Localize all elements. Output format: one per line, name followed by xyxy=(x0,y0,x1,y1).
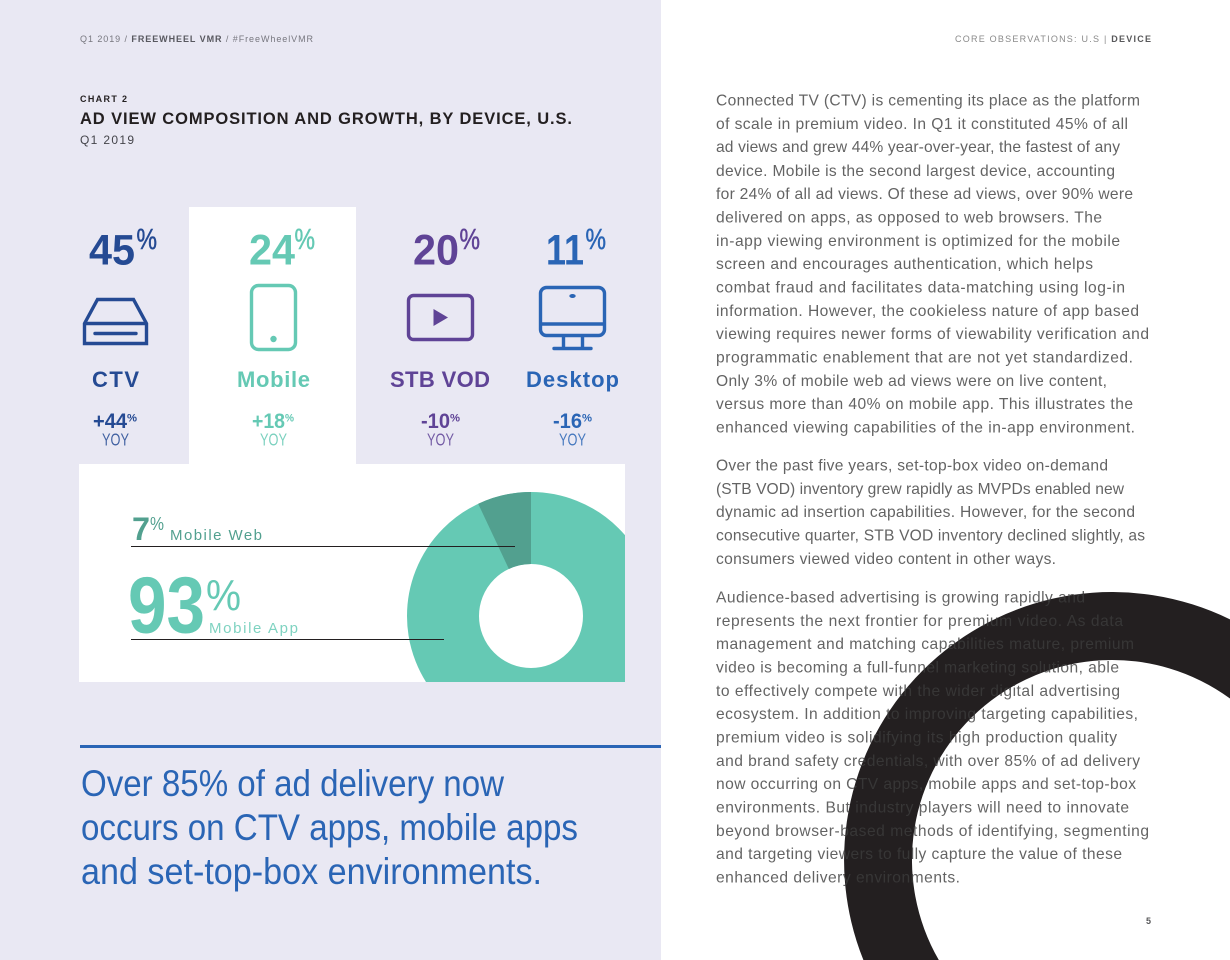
icon: video player xyxy=(408,296,472,340)
column: Desktop: Desktop xyxy=(526,367,619,392)
chart eyebrow: CHART 2 xyxy=(80,94,127,104)
body text: environments. But industry players will need to innovate xyxy=(716,800,1129,816)
body text: delivered on apps, as opposed to web browsers. The xyxy=(716,210,1102,226)
body text: video is becoming a full-funnel marketing solution, able xyxy=(716,660,1119,676)
column: Mobile: +18 xyxy=(252,410,285,433)
body text: Over the past five years, set-top-box video on-demand xyxy=(716,458,1108,474)
column: Desktop xyxy=(526,224,619,450)
stat: mobile app xyxy=(128,560,298,650)
mobile column highlight xyxy=(189,207,356,465)
stat: mobile web xyxy=(132,511,262,547)
body text: ecosystem. In addition to improving targeting capabilities, xyxy=(716,706,1138,723)
column: Desktop: % xyxy=(582,412,592,424)
body text: for 24% of all ad views. Of these ad views, over 90% were xyxy=(716,186,1133,203)
column: CTV xyxy=(84,224,157,450)
column: STB VOD: YOY xyxy=(427,430,454,450)
body text: beyond browser-based methods of identifying, segmenting xyxy=(716,823,1149,840)
column: Desktop: -16 xyxy=(553,410,582,433)
chart title: AD VIEW COMPOSITION AND GROWTH, BY DEVICE, U.S. xyxy=(80,110,572,128)
body text: Only 3% of mobile web ad views were on live content, xyxy=(716,373,1107,390)
body text: and targeting viewers to fully capture the value of these xyxy=(716,846,1122,863)
body text: and brand safety credentials, with over 85% of ad delivery xyxy=(716,753,1140,770)
body text: device. Mobile is the second largest device, accounting xyxy=(716,163,1115,180)
column: CTV: 45 xyxy=(89,226,135,274)
column: CTV: % xyxy=(136,224,157,256)
column: CTV: +44 xyxy=(93,410,127,433)
body text: in-app viewing environment is optimized for the mobile xyxy=(716,233,1120,250)
column: Mobile: YOY xyxy=(260,430,287,450)
left panel background xyxy=(0,0,661,960)
body text: of scale in premium video. In Q1 it constituted 45% of all xyxy=(716,116,1128,133)
body text: enhanced delivery environments. xyxy=(716,870,960,886)
body text: consecutive quarter, STB VOD inventory declined slightly, as xyxy=(716,528,1145,544)
column: Mobile: Mobile xyxy=(237,367,310,392)
column: STB VOD: STB VOD xyxy=(390,367,490,392)
icon: desktop monitor xyxy=(540,288,604,348)
chart period: Q1 2019 xyxy=(80,133,134,147)
column: Desktop: 11 xyxy=(546,226,584,274)
body text: Audience-based advertising is growing rapidly and xyxy=(716,590,1085,606)
page number: 5 xyxy=(1146,916,1151,926)
body text: represents the next frontier for premium video. As data xyxy=(716,613,1123,630)
callout text: occurs on CTV apps, mobile apps xyxy=(81,807,578,848)
stat: mobile app: 93 xyxy=(128,560,205,650)
column: CTV: YOY xyxy=(102,430,129,450)
callout text: and set-top-box environments. xyxy=(81,851,542,892)
body text: Connected TV (CTV) is cementing its place as the platform xyxy=(716,92,1140,110)
column: Mobile: % xyxy=(294,224,315,256)
body text: versus more than 40% on mobile app. This illustrates the xyxy=(716,396,1133,413)
stat: mobile web: % xyxy=(150,514,164,534)
column: CTV: CTV xyxy=(92,367,139,392)
body text: consumers viewed video content in other ways. xyxy=(716,551,1056,568)
body text: programmatic enablement that are not yet standardized. xyxy=(716,350,1133,366)
column: STB VOD: -10 xyxy=(421,410,450,433)
body text: to effectively compete with the wider digital advertising xyxy=(716,683,1120,700)
donut chart xyxy=(443,492,619,704)
icon: set-top box xyxy=(84,300,146,344)
header: report name: Q1 2019 / FREEWHEEL VMR / #FreeWheelVMR xyxy=(80,34,314,44)
column: CTV: % xyxy=(127,412,137,424)
stat: mobile web: 7 xyxy=(132,511,150,547)
body text: combat fraud and facilitates data-matching using log-in xyxy=(716,280,1125,296)
body text: screen and encourages authentication, which helps xyxy=(716,256,1093,273)
header: section name: CORE OBSERVATIONS: U.S | DEVICE xyxy=(955,34,1151,44)
body text: management and matching capabilities mature, premium xyxy=(716,636,1134,653)
callout text xyxy=(81,763,578,892)
column: Mobile xyxy=(237,224,315,450)
body text: (STB VOD) inventory grew rapidly as MVPDs enabled new xyxy=(716,481,1125,498)
stat: mobile app: Mobile App xyxy=(209,620,298,637)
column: Desktop: % xyxy=(586,224,606,256)
body text xyxy=(716,92,1149,886)
callout text: Over 85% of ad delivery now xyxy=(81,763,504,804)
icon: phone xyxy=(252,286,296,350)
column: STB VOD: 20 xyxy=(413,226,459,274)
body text: enhanced viewing capabilities of the in-app environment. xyxy=(716,420,1135,436)
body text: ad views and grew 44% year-over-year, the fastest of any xyxy=(716,139,1120,156)
callout rule xyxy=(80,745,661,748)
column: STB VOD xyxy=(390,224,490,450)
stat: mobile web: Mobile Web xyxy=(170,527,262,544)
stat: mobile app: % xyxy=(206,571,241,620)
column: Desktop: YOY xyxy=(559,430,586,450)
body text: now occurring on CTV apps, mobile apps and set-top-box xyxy=(716,776,1136,793)
column: Mobile: 24 xyxy=(249,226,295,274)
panel: mobile web vs app xyxy=(79,464,625,704)
column: STB VOD: % xyxy=(450,412,460,424)
body text: viewing requires newer forms of viewability verification and xyxy=(716,326,1149,343)
body text: dynamic ad insertion capabilities. However, for the second xyxy=(716,504,1135,521)
column: Mobile: % xyxy=(285,412,294,424)
body text: information. However, the cookieless nature of app based xyxy=(716,303,1139,320)
decorative black ring xyxy=(844,592,1230,960)
column: STB VOD: % xyxy=(460,224,480,256)
body text: premium video is solidifying its high production quality xyxy=(716,730,1117,746)
